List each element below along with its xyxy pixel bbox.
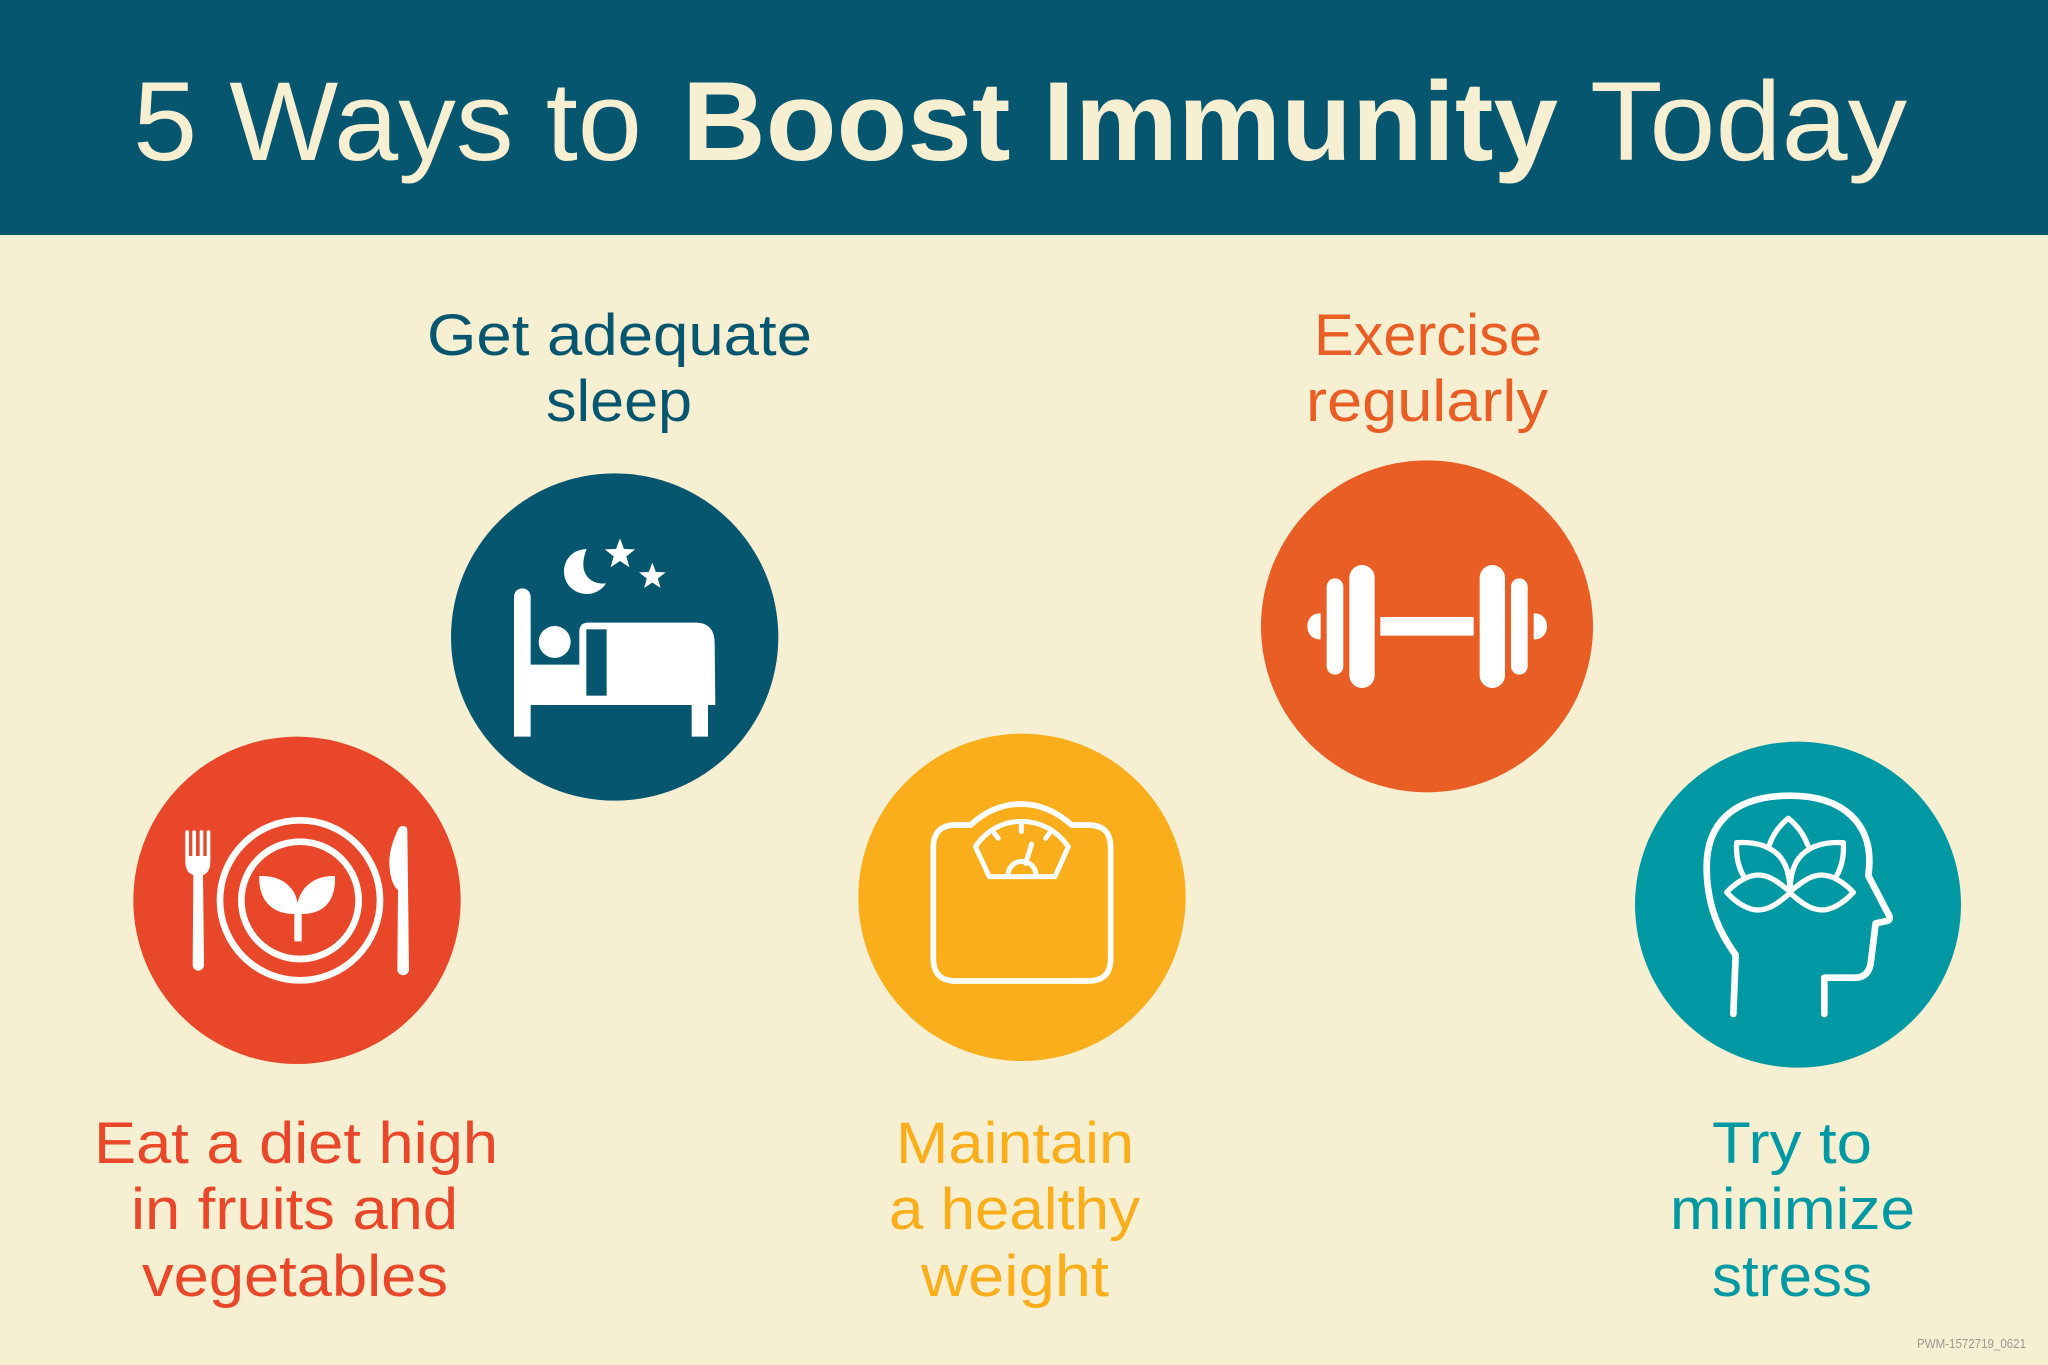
label: weight: weight xyxy=(920,1244,1109,1309)
label: exercise: Exercise xyxy=(1314,303,1542,368)
label: weight: Maintain xyxy=(896,1111,1134,1176)
icon: plate with fork, knife and sprout xyxy=(133,737,461,1064)
footer code: PWM-1572719_0621 xyxy=(1917,1336,2026,1351)
label: stress: minimize xyxy=(1670,1177,1915,1242)
label: sleep: Get adequate xyxy=(427,303,812,368)
icon: bathroom scale xyxy=(858,734,1186,1061)
label: eat a diet: in fruits and xyxy=(131,1177,458,1242)
label: sleep xyxy=(427,303,812,434)
title: Boost Immunity xyxy=(682,59,1558,184)
icon: person in bed with moon and stars xyxy=(451,473,778,801)
header band xyxy=(0,0,2048,235)
panel: exercise regularly xyxy=(1261,303,1593,792)
panel: try to minimize stress xyxy=(1635,742,1961,1309)
label: stress: Try to xyxy=(1712,1111,1872,1176)
label: exercise xyxy=(1306,303,1548,434)
icon: dumbbell xyxy=(1261,460,1593,792)
label: stress: stress xyxy=(1712,1244,1872,1309)
label: sleep: sleep xyxy=(546,369,692,434)
title xyxy=(133,59,1907,184)
label: eat a diet: Eat a diet high xyxy=(94,1111,498,1176)
panel: eat a diet high in fruits and vegetables xyxy=(94,737,498,1309)
label: eat a diet xyxy=(94,1111,498,1309)
label: eat a diet: vegetables xyxy=(142,1244,448,1309)
icon: head with lotus xyxy=(1635,742,1961,1068)
panel: maintain a healthy weight xyxy=(858,734,1186,1309)
label: weight xyxy=(889,1111,1140,1309)
title: 5 Ways to xyxy=(133,59,642,184)
panel: get adequate sleep xyxy=(427,303,812,801)
label: stress xyxy=(1670,1111,1915,1309)
label: exercise: regularly xyxy=(1306,369,1548,434)
title: Today xyxy=(1590,59,1907,184)
label: weight: a healthy xyxy=(889,1177,1140,1242)
